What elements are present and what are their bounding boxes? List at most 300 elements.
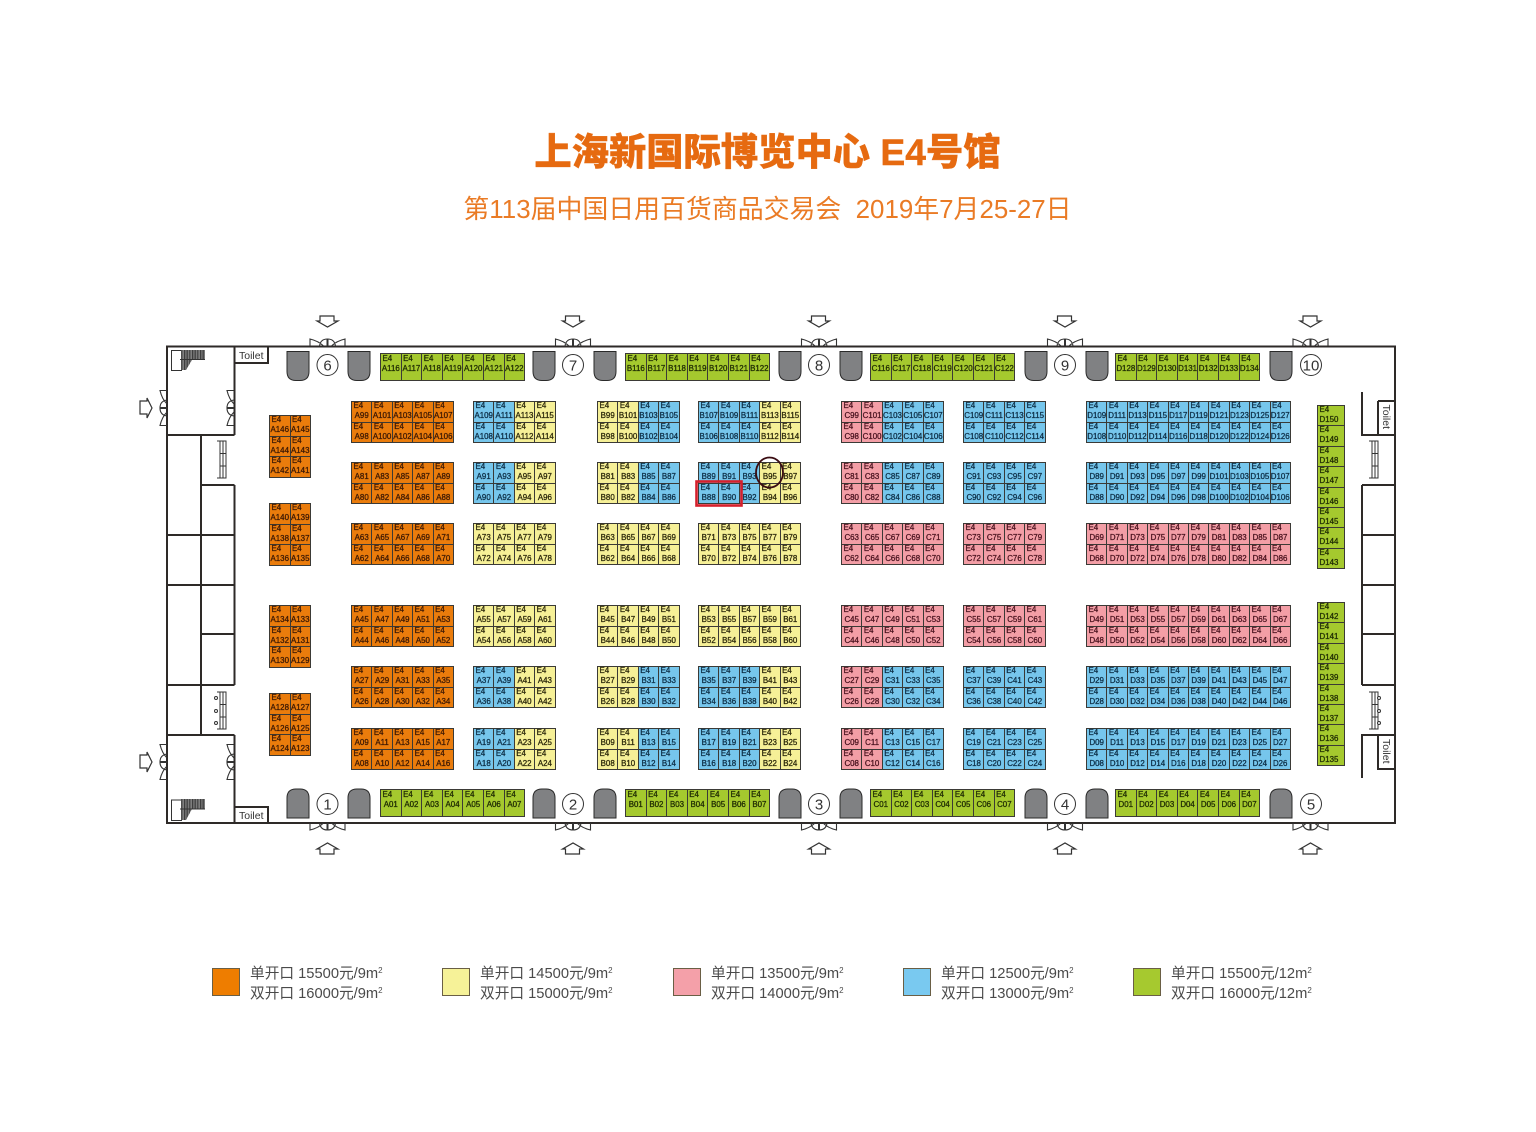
booths: D48-D67: D67 [1273,615,1287,624]
booths: C90-C97: E4 [966,482,975,492]
booths: A98-A107 [351,401,454,443]
booths: C90-C97: C96 [1028,492,1042,502]
booths: B106-B115: B109 [720,411,738,420]
booths: B62-B69 [597,523,680,565]
booths: D88-D107: D97 [1171,472,1186,481]
booths: B08-B15: B08 [601,758,615,768]
booths: D68-D87: E4 [1211,523,1220,532]
booths: D48-D67: E4 [1231,605,1241,614]
booths: B62-B69: B67 [641,533,656,542]
booths: bottom green D row: D04 [1180,800,1195,808]
booths: D48-D67: D62 [1232,636,1247,644]
booths: D08-D27: E4 [1170,728,1180,737]
booths: A54-A61: A58 [517,636,532,644]
booths: B44-B51: E4 [620,605,630,614]
booths: C62-C71: C67 [885,533,900,542]
booths: C98-C107: E4 [905,422,914,430]
booths: D48-D67: D48 [1089,636,1104,644]
booths: D08-D27: E4 [1190,728,1200,737]
booths: D108-D127: D115 [1149,411,1167,420]
booths: C26-C35: C31 [885,676,900,685]
booths: A98-A107: E4 [435,401,445,410]
booths: D88-D107: E4 [1231,462,1241,471]
booths: D68-D87: E4 [1211,544,1220,552]
booths: right column D150-D143 [1317,405,1345,569]
booths: right column D142-D135: E4 [1320,704,1329,713]
booths: A18-A25: A22 [517,758,532,768]
booths: B44-B51: B50 [662,636,676,644]
booths: D08-D27: E4 [1129,728,1139,737]
booths: C90-C97: C91 [966,472,981,481]
booths: left column A146-A141 [269,415,311,478]
booths: right column D142-D135: E4 [1320,724,1329,733]
numbered gates [317,354,1322,814]
booths: D108-D127: D126 [1271,432,1290,440]
booths: top green D row: E4 [1200,354,1210,362]
booths: D08-D27: D20 [1212,758,1226,768]
booths: B34-B43: B43 [783,676,797,685]
booths: B88-B97: B93 [742,472,756,481]
legend item: blue: 双开口 13000元/9m2 [941,986,1074,1002]
booths: left column A146-A141: A141 [291,466,309,475]
booths: B26-B33: B27 [601,676,615,685]
booths: B62-B69: E4 [661,544,670,552]
booths: left column A134-A129: A132 [271,636,289,644]
booths: C44-C53: E4 [905,605,914,614]
booths: left column A128-A123: E4 [272,714,281,722]
booths: top green B row: E4 [669,354,678,362]
booths: A62-A71: E4 [374,523,384,532]
booths: A108-A115: A114 [536,432,554,440]
booths: C80-C89: C85 [885,472,900,481]
booths: C54-C61: E4 [986,605,996,614]
booths: A08-A17: E4 [394,748,404,758]
booths: D28-D47: E4 [1150,666,1159,675]
booths: left column A128-A123: A123 [291,744,309,753]
booths: B16-B25: E4 [700,728,710,737]
booths: B44-B51: B48 [641,636,656,644]
booths: D108-D127: E4 [1272,401,1282,410]
booths: D28-D47: D35 [1151,676,1165,685]
booths: A26-A35: E4 [354,686,363,696]
booths: D88-D107: D93 [1130,472,1145,481]
booths: D88-D107: E4 [1272,482,1282,492]
booths: C80-C89: C84 [885,492,900,502]
booths: B34-B43 [698,666,801,708]
booths: top green D row: E4 [1241,354,1251,362]
booths: C72-C79: C77 [1007,533,1022,542]
booths: D108-D127: E4 [1211,401,1220,410]
booths: left column A146-A141: A146 [271,425,289,434]
booths: A98-A107: E4 [415,401,424,410]
booths: B88-B97: E4 [741,462,751,471]
legend item: blue [903,966,1074,1002]
numbered gates: 2 [569,796,577,814]
booths: B80-B87: E4 [620,482,630,492]
booths: D28-D47: E4 [1129,666,1139,675]
booths: top green A row [380,353,525,381]
booths: A08-A17: E4 [415,728,424,737]
booths: D88-D107: D92 [1130,492,1145,502]
booths: C44-C53 [841,605,944,647]
booths: D08-D27: E4 [1231,728,1241,737]
booths: C26-C35: C30 [885,696,900,706]
booths: B70-B79: E4 [762,544,771,552]
booths: D108-D127: D117 [1169,411,1187,420]
booths: A44-A53: A48 [395,636,410,644]
booths: A72-A79: E4 [516,523,526,532]
booths: left column A128-A123: A124 [271,744,289,753]
booths: C72-C79: E4 [1027,544,1036,552]
booths: B70-B79: B73 [722,533,736,542]
booths: A18-A25: A19 [477,738,491,747]
booths: C90-C97: C92 [987,492,1001,502]
booths: top green B row: E4 [648,354,658,362]
booths: A36-A43: A42 [538,696,552,706]
booths: A54-A61: E4 [537,605,546,614]
booths: D48-D67: E4 [1109,605,1119,614]
booths: A18-A25: A25 [538,738,552,747]
booths: C18-C25: C20 [987,758,1001,768]
booths: C98-C107: E4 [905,401,914,410]
booths: B106-B115: B110 [741,432,758,440]
booths: D88-D107: D101 [1210,472,1228,481]
booths: B80-B87: B80 [601,492,615,502]
booths: C98-C107: C100 [863,432,882,440]
booths: B08-B15: E4 [600,728,609,737]
booths: B52-B61: E4 [721,605,731,614]
booths: C26-C35: E4 [925,686,935,696]
booths: A80-A89: A84 [395,492,410,502]
booths: B34-B43: E4 [721,686,731,696]
booths: C18-C25: E4 [966,728,975,737]
booths: C80-C89: C87 [906,472,920,481]
booths: D68-D87: D77 [1171,533,1186,542]
booths: C98-C107: E4 [844,401,853,410]
booths: A26-A35: A29 [375,676,389,685]
booths: C44-C53: E4 [925,605,935,614]
numbered gates: 4 [1061,796,1069,814]
booths: C44-C53: C53 [926,615,940,624]
booths: left column A128-A123: E4 [292,734,302,743]
booths: D88-D107: E4 [1272,462,1282,471]
booths: D28-D47: E4 [1088,666,1098,675]
booths: A90-A97: A96 [538,492,552,502]
booths: A26-A35: A34 [436,696,450,706]
booths: D48-D67: D52 [1130,636,1145,644]
booths: D108-D127: D124 [1250,432,1269,440]
booths: A62-A71: A70 [436,554,450,562]
booths: A18-A25: E4 [537,748,546,758]
booths: left column A140-A135: A136 [271,554,289,563]
booths: C54-C61: C58 [1007,636,1022,644]
booths: B52-B61: E4 [782,605,792,614]
booths: B26-B33: B32 [662,696,676,706]
booths: D88-D107: D103 [1230,472,1249,481]
booths: D88-D107: D106 [1271,492,1290,502]
booths: D108-D127: D116 [1169,432,1187,440]
booths: C108-C115: E4 [986,422,996,430]
booths: C18-C25: C19 [966,738,981,747]
booths: right column D142-D135: D136 [1320,734,1338,743]
booths: C44-C53: E4 [844,605,853,614]
booths: C36-C43: C42 [1028,696,1042,706]
booths: D68-D87: E4 [1150,544,1159,552]
booths: A62-A71: A68 [416,554,430,562]
booths: top green C row: C116 [872,364,890,372]
booths: A18-A25: E4 [476,728,485,737]
booths: D108-D127: D113 [1128,411,1147,420]
booths: C54-C61: E4 [986,626,996,634]
booths: bottom green C row: C03 [915,800,929,808]
booths: B26-B33: E4 [661,686,670,696]
booths: D48-D67: E4 [1129,626,1139,634]
booths: D108-D127: E4 [1129,422,1139,430]
booths: D48-D67: E4 [1088,626,1098,634]
booths: B16-B25: B25 [783,738,797,747]
booths: top green D row: E4 [1138,354,1148,362]
booths: D68-D87: D79 [1191,533,1206,542]
booths: A44-A53: E4 [394,626,404,634]
booths: C108-C115: E4 [1027,401,1036,410]
booths: A18-A25: A20 [497,758,511,768]
booths: D108-D127: D109 [1087,411,1106,420]
booths: C44-C53: C51 [906,615,920,624]
booths: B16-B25: E4 [782,748,792,758]
booths: C72-C79: C73 [966,533,981,542]
booths: D28-D47: E4 [1272,686,1282,696]
booths: A26-A35: E4 [435,666,445,675]
booths: C08-C17: C08 [844,758,859,768]
booths: A44-A53: E4 [394,605,404,614]
booths: D08-D27: D27 [1273,738,1287,747]
booths: C36-C43: C40 [1007,696,1022,706]
booths: D28-D47: E4 [1252,666,1261,675]
booths: C08-C17: C13 [885,738,900,747]
booths: A36-A43: E4 [537,686,546,696]
booths: A90-A97: E4 [476,482,485,492]
booths: bottom green A row: A03 [425,800,439,808]
booths: A08-A17: A14 [416,758,430,768]
booths: D48-D67: E4 [1272,605,1282,614]
numbered gates: 5 [1307,796,1315,814]
booths: D28-D47: E4 [1190,666,1200,675]
booths: B62-B69: B63 [601,533,615,542]
booths: D28-D47: D46 [1273,696,1287,706]
booths: bottom green A row: E4 [382,790,392,798]
booths: C62-C71: C70 [926,554,940,562]
booths: D68-D87: D85 [1253,533,1267,542]
booths: A26-A35: A26 [355,696,369,706]
booths: C18-C25: C21 [987,738,1001,747]
booths: B34-B43: E4 [762,686,771,696]
booths: C98-C107: C102 [883,432,902,440]
booths: D08-D27: E4 [1252,728,1261,737]
booths: D68-D87: E4 [1129,523,1139,532]
booths: B70-B79: B77 [763,533,777,542]
booths: D68-D87: D86 [1273,554,1287,562]
booths: B26-B33: E4 [620,686,630,696]
booths: top green D row: D129 [1137,364,1156,372]
booths: D88-D107: E4 [1150,482,1159,492]
booths: B62-B69: B64 [621,554,635,562]
booths: C62-C71: C65 [865,533,879,542]
left side doors [160,390,234,780]
booths: C80-C89: C89 [926,472,940,481]
booths: C54-C61: C57 [987,615,1001,624]
booths: A44-A53: A51 [416,615,430,624]
booths: A36-A43: A41 [517,676,532,685]
booths: B80-B87: E4 [600,462,609,471]
booths: B44-B51: E4 [620,626,630,634]
booths: B26-B33: E4 [661,666,670,675]
booths: C08-C17: E4 [925,748,935,758]
booths: left column A146-A141: E4 [292,456,302,465]
booths: C54-C61: E4 [1006,605,1016,614]
booths: bottom green A row: E4 [465,790,475,798]
booths: A26-A35: E4 [415,666,424,675]
booths: A44-A53: A50 [416,636,430,644]
outer wall [167,346,1395,823]
booths: B52-B61: E4 [700,626,710,634]
booths: left column A128-A123: E4 [272,693,281,702]
booths: D68-D87: D76 [1171,554,1186,562]
booths: left column A134-A129: E4 [292,605,302,614]
booths: C08-C17: E4 [905,728,914,737]
booths: D08-D27: D08 [1089,758,1104,768]
booths: C62-C71: E4 [864,544,874,552]
booths: A98-A107: A106 [434,432,452,440]
booths: C90-C97: E4 [986,482,996,492]
booths: bottom green C row: C02 [894,800,909,808]
booths: A72-A79: A79 [538,533,552,542]
booths: D28-D47: D42 [1232,696,1247,706]
booths: B80-B87: E4 [620,462,630,471]
booths: B16-B25: B19 [722,738,736,747]
booths: A08-A17 [351,728,454,770]
booths: A98-A107: A105 [414,411,432,420]
booths: D88-D107 [1086,462,1291,504]
booths: bottom green B row: E4 [628,790,637,798]
booths: left column A134-A129: A134 [271,615,289,624]
booths: C80-C89: E4 [905,462,914,471]
booths: top green A row: A116 [382,364,400,372]
booths: A98-A107: E4 [354,401,363,410]
booths: A18-A25 [473,728,556,770]
booths: A36-A43: A39 [497,676,511,685]
booths: D28-D47: E4 [1129,686,1139,696]
booths: C36-C43: C39 [987,676,1001,685]
booths: C90-C97: E4 [966,462,975,471]
booths: D08-D27: E4 [1170,748,1180,758]
booths: A18-A25: E4 [476,748,485,758]
booths: A08-A17: E4 [354,728,363,737]
booths: C18-C25: E4 [1027,728,1036,737]
booths: bottom green B row: B04 [691,800,705,808]
booths: bottom green B row: E4 [648,790,658,798]
booths: B34-B43: B34 [702,696,716,706]
booths: top green A row: A120 [464,364,482,372]
booths: D08-D27: D11 [1110,738,1124,747]
booths: left column A146-A141: E4 [272,436,281,444]
booths: A72-A79: A75 [497,533,511,542]
booths: B44-B51: B45 [601,615,615,624]
booths: A90-A97: A93 [497,472,511,481]
numbered gates: 6 [323,358,332,374]
booths: C44-C53: E4 [905,626,914,634]
booths: C108-C115: C109 [964,411,983,420]
booths: D28-D47: D32 [1130,696,1145,706]
booths: C26-C35: E4 [905,686,914,696]
booths: C08-C17: E4 [925,728,935,737]
booths: D48-D67: D60 [1212,636,1226,644]
booths: A44-A53: E4 [435,626,445,634]
booths: A90-A97: E4 [496,462,506,471]
booths: C108-C115: C110 [985,432,1003,440]
booths: C26-C35: C28 [865,696,879,706]
booths: right column D142-D135: D142 [1320,612,1338,621]
booths: B106-B115: E4 [741,401,751,410]
booths: A26-A35: A28 [375,696,389,706]
booths: bottom green C row: E4 [975,790,985,798]
booths: D88-D107: E4 [1211,462,1220,471]
booths: A108-A115: A109 [474,411,493,420]
booths: B70-B79: B70 [702,554,716,562]
booths: right column D150-D143: E4 [1320,466,1329,475]
booths: B44-B51: E4 [600,605,609,614]
booths: B88-B97 [698,462,801,504]
booths: B08-B15: E4 [620,748,630,758]
booths: A54-A61: E4 [516,605,526,614]
booths: A62-A71: E4 [354,523,363,532]
booths: top green D row: D133 [1219,364,1238,372]
booths: A62-A71: A66 [395,554,410,562]
booths: A44-A53 [351,605,454,647]
booths: D08-D27: E4 [1211,748,1220,758]
booths: B62-B69: E4 [640,523,650,532]
booths: top green B row: B117 [647,364,665,372]
booths: left column A140-A135: A138 [271,534,289,542]
booths: D88-D107: E4 [1150,462,1159,471]
booths: C44-C53: E4 [884,605,894,614]
booths: C108-C115: E4 [966,422,975,430]
booths: D108-D127: E4 [1190,401,1200,410]
booths: D88-D107: E4 [1129,462,1139,471]
booths: C44-C53: E4 [864,626,874,634]
booths: C08-C17: C10 [865,758,879,768]
booths: B70-B79: E4 [782,544,792,552]
booths: D08-D27: E4 [1150,748,1159,758]
booths: B34-B43: B38 [742,696,756,706]
booths: D68-D87: D83 [1232,533,1247,542]
booths: top green B row: B122 [750,364,769,372]
booths: D68-D87: D82 [1232,554,1247,562]
booths: A08-A17: E4 [435,748,445,758]
booths: A44-A53: E4 [354,605,363,614]
booths: C98-C107: C105 [903,411,922,420]
booths: C98-C107: C99 [844,411,859,420]
booths: C62-C71: C71 [926,533,940,542]
booths: D68-D87: E4 [1088,544,1098,552]
legend item: green [1133,966,1312,1002]
booths: top green C row: E4 [955,354,965,362]
booths: A98-A107: E4 [394,422,404,430]
booths: A90-A97: A95 [517,472,532,481]
booths: A98-A107: E4 [354,422,363,430]
booths: A54-A61: A61 [538,615,552,624]
booths: B106-B115: E4 [700,422,710,430]
booths: D88-D107: D90 [1110,492,1124,502]
